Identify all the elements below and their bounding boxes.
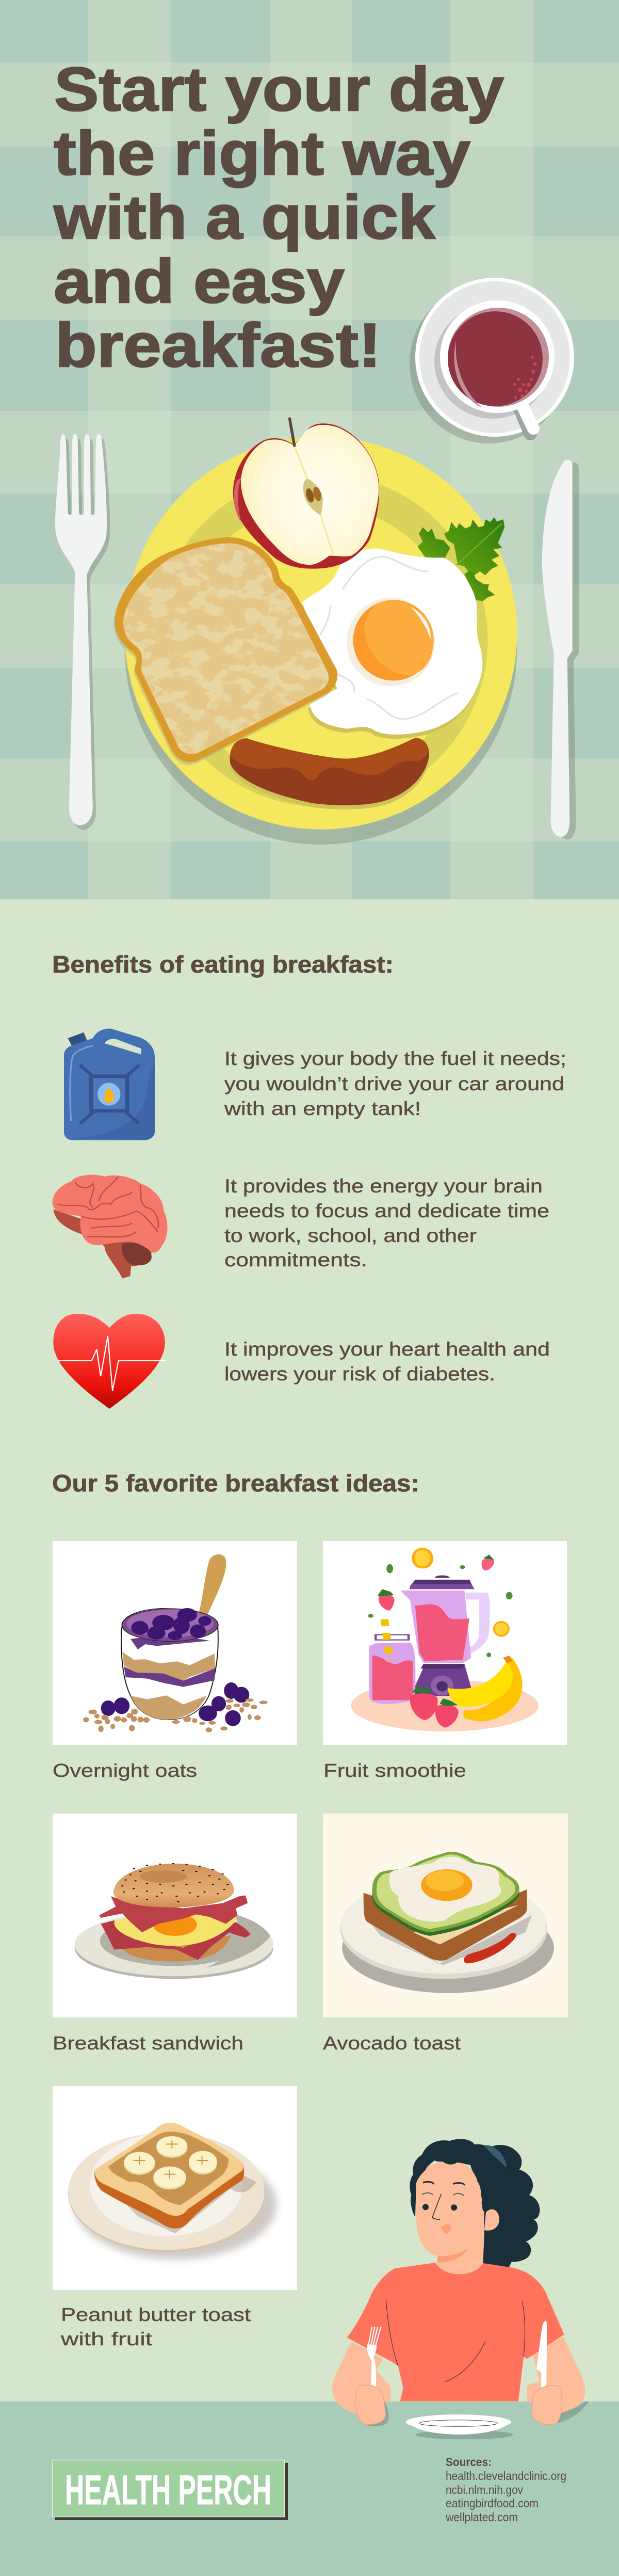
heading: breakfast ideas: Our 5 favorite breakfast ideas: (52, 1470, 419, 1497)
label: peanut butter toast with fruit: Peanut butter toast (61, 2304, 251, 2325)
face and neck (416, 2161, 484, 2275)
hair back (482, 2145, 540, 2268)
knife (542, 460, 579, 839)
sausage (230, 738, 429, 809)
right hand thumb (527, 2384, 537, 2402)
hands (355, 2385, 562, 2425)
facial features (422, 2182, 465, 2234)
label: fruit smoothie: Fruit smoothie (323, 1760, 466, 1781)
benefit text: fuel: It gives your body the fuel it needs; (224, 1048, 566, 1069)
icon: brain (53, 1175, 168, 1279)
label: peanut butter toast with fruit: with fruit (60, 2328, 152, 2349)
t-shirt (347, 2263, 564, 2402)
heading: benefits: Benefits of eating breakfast: (52, 951, 394, 978)
empty plate (405, 2414, 513, 2439)
benefit text: fuel (224, 1048, 566, 1119)
icon: coffee cup on saucer (410, 278, 574, 443)
title: Start your day (54, 55, 504, 124)
card: avocado toast image (323, 1814, 568, 2017)
hairband (484, 2145, 507, 2168)
card: overnight oats image (53, 1541, 297, 1745)
benefit text: brain: needs to focus and dedicate time (224, 1200, 549, 1221)
left hand thumb (376, 2384, 391, 2402)
neck shadow (438, 2248, 469, 2263)
sources: eatingbirdfood.com (446, 2497, 539, 2510)
apple half (233, 419, 379, 569)
arms (332, 2337, 585, 2414)
sources: wellplated.com (445, 2510, 518, 2524)
icon: heart (53, 1314, 166, 1409)
benefit text: fuel: with an empty tank! (224, 1098, 421, 1119)
fork (55, 434, 110, 830)
sources: health.clevelandclinic.org (446, 2469, 566, 2483)
label: peanut butter toast with fruit (60, 2304, 251, 2349)
benefit text: brain: It provides the energy your brain (224, 1175, 543, 1197)
benefit text: brain: to work, school, and other (224, 1225, 477, 1246)
sources (445, 2455, 566, 2524)
plaid tablecloth header background (0, 0, 619, 899)
benefit text: brain (224, 1175, 549, 1270)
title: breakfast! (55, 311, 381, 380)
parsley (417, 517, 504, 601)
label: breakfast sandwich: Breakfast sandwich (53, 2032, 243, 2054)
fried egg (300, 548, 482, 739)
bread slice (114, 537, 337, 765)
sources: ncbi.nlm.nih.gov (446, 2483, 523, 2497)
card: breakfast sandwich image (53, 1814, 297, 2017)
logo: Health Perch: HEALTH PERCH (65, 2467, 271, 2514)
sources: Sources: (446, 2455, 492, 2469)
shirt creases (386, 2299, 525, 2382)
icon: fuel can (64, 1028, 155, 1140)
label: overnight oats: Overnight oats (53, 1760, 197, 1781)
plate (125, 437, 517, 845)
knife held (536, 2320, 547, 2388)
title (53, 55, 504, 380)
label: avocado toast: Avocado toast (323, 2032, 461, 2054)
title: with a quick (53, 183, 435, 252)
logo: Health Perch (53, 2460, 288, 2520)
table shadows (367, 2402, 589, 2426)
fork held (367, 2327, 381, 2388)
card: fruit smoothie image (323, 1541, 567, 1745)
title: the right way (54, 119, 470, 188)
illustration: person at table (332, 2139, 589, 2439)
title: and easy (54, 247, 345, 316)
benefit text: fuel: you wouldn’t drive your car around (224, 1073, 564, 1094)
ear (484, 2209, 499, 2231)
illustration: breakfast plate (114, 419, 517, 845)
benefit text: brain: commitments. (224, 1249, 367, 1270)
benefit text: heart (224, 1339, 550, 1385)
benefit text: heart: It improves your heart health and (224, 1339, 550, 1360)
benefit text: heart: lowers your risk of diabetes. (224, 1363, 495, 1385)
hair front (410, 2139, 508, 2217)
card: peanut butter toast image (53, 2086, 297, 2290)
